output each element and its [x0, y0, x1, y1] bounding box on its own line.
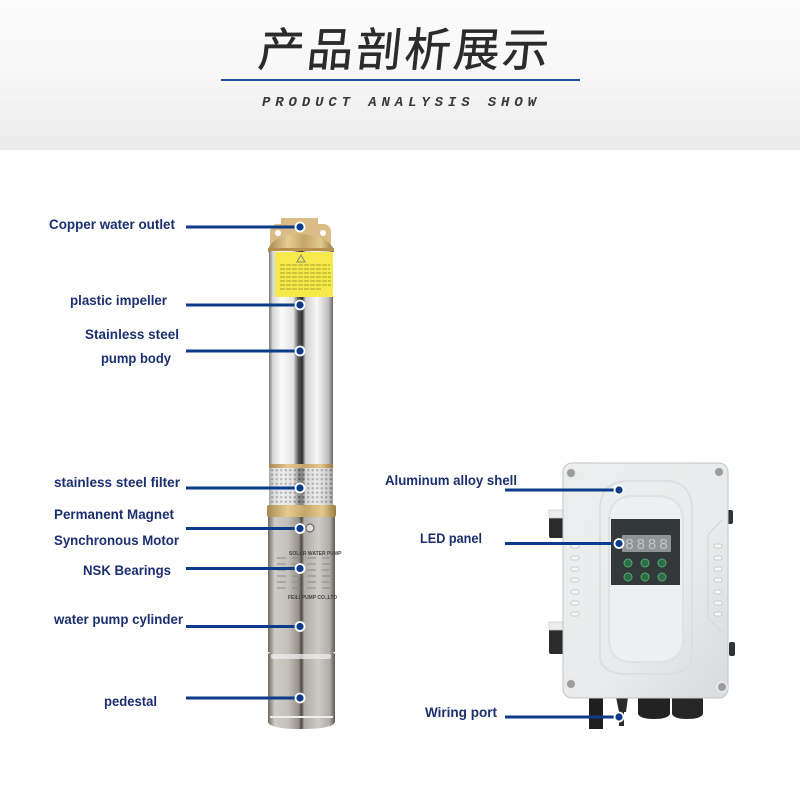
yellow warning label — [275, 252, 333, 297]
callout: bearings — [186, 564, 304, 573]
label: Permanent Magnet: Permanent Magnet — [54, 506, 174, 522]
pump illustration — [267, 218, 342, 729]
label: Aluminum alloy shell: Aluminum alloy shell — [385, 472, 517, 488]
title underline — [221, 79, 580, 81]
LED control panel — [611, 519, 680, 585]
callout: copper water outlet — [186, 222, 304, 232]
callout lines and markers — [186, 222, 624, 722]
motor body: SOLAR WATER PUMP — [289, 551, 342, 557]
label: stainless steel filter: stainless steel filter — [54, 474, 181, 490]
controller box — [549, 463, 735, 729]
LED control panel: 8888 — [625, 537, 668, 554]
callout: motor — [186, 524, 304, 533]
label: plastic impeller: plastic impeller — [70, 292, 168, 308]
pedestal — [268, 652, 335, 729]
label: LED panel: LED panel — [420, 530, 482, 546]
label: Synchronous Motor: Synchronous Motor — [54, 532, 180, 548]
side brackets — [549, 510, 735, 656]
motor body: FEILI PUMP CO.,LTD — [288, 595, 337, 601]
callout: pedestal — [186, 694, 304, 702]
motor body — [268, 517, 342, 652]
header band — [0, 0, 800, 150]
callout: wiring port — [505, 712, 624, 722]
label: pedestal: pedestal — [104, 693, 157, 709]
upper steel body — [269, 251, 333, 465]
callout: LED panel — [505, 539, 624, 548]
label: water pump cylinder: water pump cylinder — [53, 611, 184, 627]
label: Copper water outlet: Copper water outlet — [49, 216, 175, 232]
aluminum shell — [563, 463, 728, 698]
title: 产品剖析展示 — [256, 24, 551, 76]
label: NSK Bearings: NSK Bearings — [83, 562, 171, 578]
callout: cylinder — [186, 622, 304, 631]
cable glands and wiring — [589, 697, 703, 729]
callout: pump body — [186, 346, 304, 356]
callout: filter — [186, 484, 304, 492]
brass ring — [267, 505, 336, 517]
label: pump body: pump body — [101, 350, 171, 366]
subtitle: PRODUCT ANALYSIS SHOW — [262, 95, 538, 111]
corner screws — [566, 467, 727, 692]
label: Wiring port: Wiring port — [425, 704, 497, 720]
stainless steel filter — [269, 464, 333, 505]
label: Stainless steel: Stainless steel — [85, 326, 179, 342]
callout: plastic impeller — [186, 300, 304, 310]
copper water outlet — [268, 218, 334, 252]
callout: aluminum shell — [505, 486, 624, 494]
